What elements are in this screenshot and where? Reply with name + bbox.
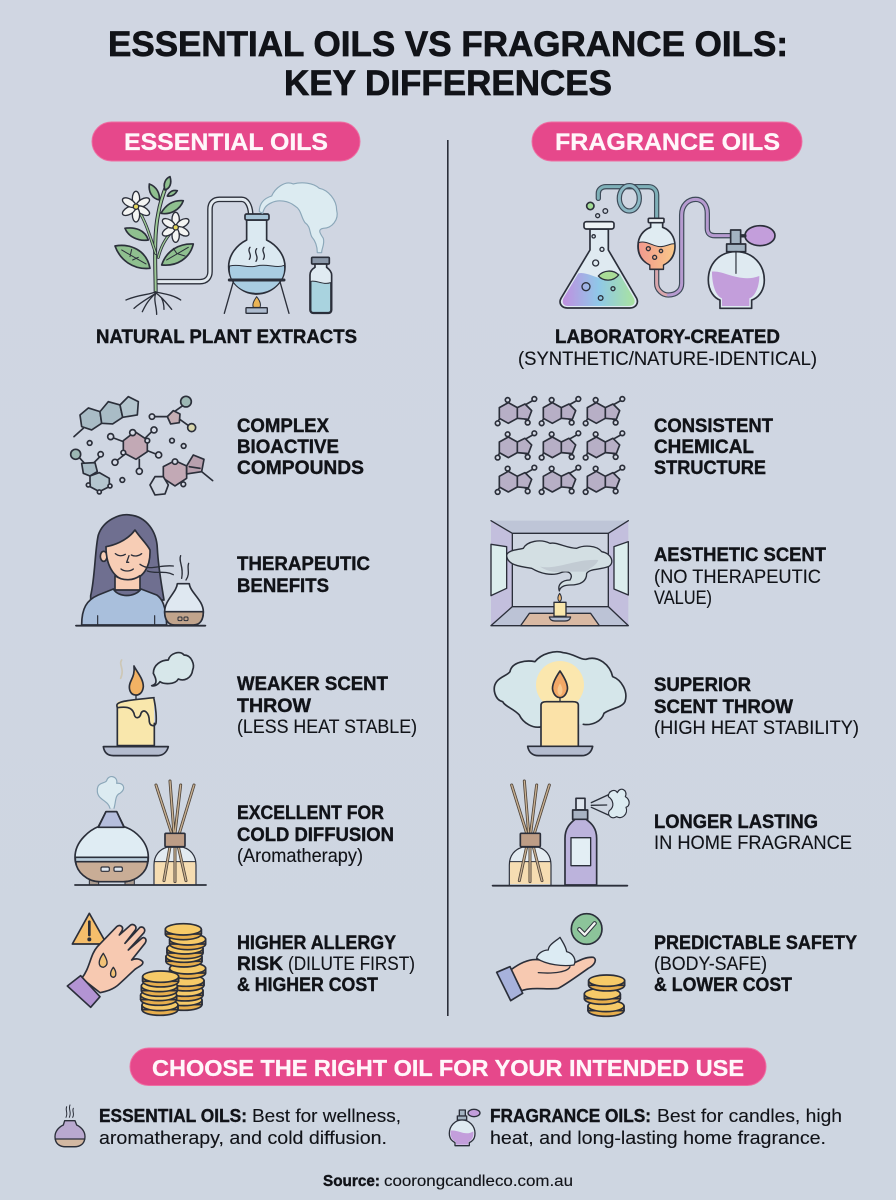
text: higher allergy risk: & HIGHER COST <box>237 975 378 996</box>
text: higher allergy risk <box>237 933 415 996</box>
summary: fragrance oils: Best for candles, high <box>657 1106 842 1126</box>
text: aesthetic scent <box>654 545 826 609</box>
title: KEY DIFFERENCES <box>284 64 612 103</box>
text: aesthetic scent: VALUE) <box>654 588 712 609</box>
heading pill: essential oils <box>92 122 360 161</box>
icon: allergy warning and coins <box>67 913 206 1015</box>
text: complex bioactive compounds: COMPLEX <box>237 416 329 437</box>
icon: candle with weak scent <box>103 653 193 756</box>
icon: laboratory glassware and perfume <box>560 186 775 308</box>
centre divider <box>447 140 449 1016</box>
icon: diffuser and reed diffuser <box>75 777 206 885</box>
icon: plant distillation <box>115 177 337 314</box>
text: consistent chemical structure: CONSISTENT <box>654 416 773 437</box>
heading pill: fragrance oils: FRAGRANCE OILS <box>555 129 780 156</box>
text: predictable safety: PREDICTABLE SAFETY <box>654 933 857 954</box>
text: predictable safety: & LOWER COST <box>654 975 792 996</box>
text: superior scent throw: (HIGH HEAT STABILITY) <box>654 718 859 739</box>
text: consistent chemical structure <box>654 416 773 479</box>
title: ESSENTIAL OILS VS FRAGRANCE OILS: <box>108 25 788 64</box>
text: weaker scent throw: (LESS HEAT STABLE) <box>237 717 417 738</box>
summary: fragrance oils: heat, and long-lasting home fragrance. <box>490 1128 826 1148</box>
panel: fragrance oils <box>491 122 859 1016</box>
text: longer lasting: LONGER LASTING <box>654 812 818 833</box>
heading pill: essential oils: ESSENTIAL OILS <box>124 129 328 156</box>
text: complex bioactive compounds: COMPOUNDS <box>237 458 364 479</box>
summary: fragrance oils: FRAGRANCE OILS: <box>490 1106 651 1126</box>
text: higher allergy risk: (DILUTE FIRST) <box>288 954 415 975</box>
source line: coorongcandleco.com.au <box>384 1173 573 1190</box>
text: aesthetic scent: AESTHETIC SCENT <box>654 545 826 566</box>
text: weaker scent throw: WEAKER SCENT <box>237 674 388 695</box>
icon: woman with diffuser <box>76 515 205 626</box>
text: predictable safety <box>654 933 857 996</box>
icon: reed diffuser and spray <box>493 781 629 886</box>
text: weaker scent throw: THROW <box>237 696 311 717</box>
text: consistent chemical structure: CHEMICAL <box>654 437 754 458</box>
text: superior scent throw <box>654 675 859 739</box>
icon: uniform molecules grid <box>495 397 625 494</box>
summary: fragrance oils <box>449 1106 842 1148</box>
label: laboratory-created: (SYNTHETIC/NATURE-IDENTICAL) <box>518 349 817 370</box>
text: weaker scent throw <box>237 674 417 738</box>
summary: essential oils <box>55 1105 401 1148</box>
text: excellent for cold diffusion: EXCELLENT FOR <box>237 803 384 824</box>
summary: essential oils: aromatherapy, and cold diffusion. <box>99 1128 387 1148</box>
icon: hand with cream and coins <box>497 914 625 1016</box>
text: predictable safety: (BODY-SAFE) <box>654 954 767 975</box>
text: excellent for cold diffusion <box>237 803 394 867</box>
text: complex bioactive compounds <box>237 416 364 479</box>
label: laboratory-created: LABORATORY-CREATED <box>555 327 780 348</box>
title <box>108 25 788 103</box>
label: natural plant extracts: NATURAL PLANT EXTRACTS <box>96 327 357 348</box>
label: laboratory-created <box>518 327 817 370</box>
summary: essential oils: Best for wellness, <box>252 1106 401 1126</box>
icon: room with scent cloud <box>491 521 628 626</box>
text: longer lasting <box>654 812 852 854</box>
text: aesthetic scent: (NO THERAPEUTIC <box>654 567 821 588</box>
icon: small perfume bottle <box>449 1109 480 1146</box>
panel: essential oils <box>67 122 417 1015</box>
text: superior scent throw: SUPERIOR <box>654 675 751 696</box>
summary: essential oils: ESSENTIAL OILS: <box>99 1106 247 1126</box>
text: therapeutic benefits: BENEFITS <box>237 576 329 597</box>
text: superior scent throw: SCENT THROW <box>654 697 793 718</box>
text: complex bioactive compounds: BIOACTIVE <box>237 437 339 458</box>
banner: choose the right oil: CHOOSE THE RIGHT OIL FOR YOUR INTENDED USE <box>152 1055 744 1081</box>
text: consistent chemical structure: STRUCTURE <box>654 458 766 479</box>
icon: small diffuser <box>55 1105 85 1147</box>
source line: Source: <box>323 1173 380 1190</box>
text: higher allergy risk: HIGHER ALLERGY <box>237 933 396 954</box>
icon: candle with strong scent cloud <box>494 652 626 756</box>
text: excellent for cold diffusion: (Aromatherapy) <box>237 846 363 867</box>
heading pill: fragrance oils <box>532 122 802 161</box>
banner: choose the right oil <box>130 1048 766 1086</box>
text: therapeutic benefits <box>237 554 370 597</box>
text: higher allergy risk: RISK <box>237 954 283 975</box>
text: excellent for cold diffusion: COLD DIFFUSION <box>237 825 394 846</box>
text: longer lasting: IN HOME FRAGRANCE <box>654 833 852 854</box>
icon: complex molecules <box>71 396 213 495</box>
text: therapeutic benefits: THERAPEUTIC <box>237 554 370 575</box>
